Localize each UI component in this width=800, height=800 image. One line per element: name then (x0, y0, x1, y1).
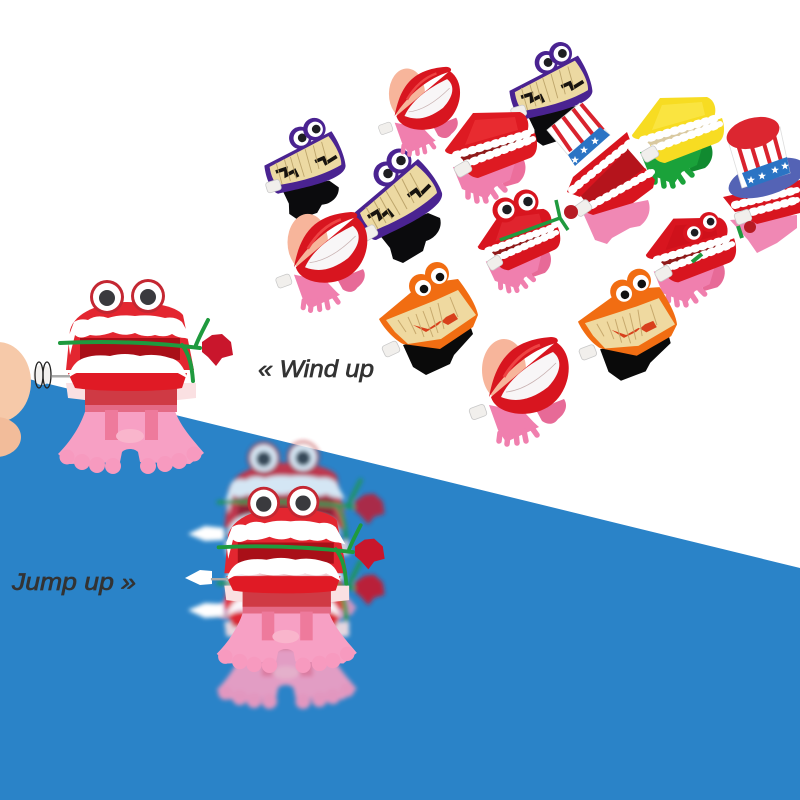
striped hat (547, 103, 610, 166)
label: jump up: Jump up » (11, 569, 136, 596)
toy: jumping teeth with motion blur (185, 441, 385, 709)
main key (185, 570, 212, 585)
toy: large rose chatter teeth (52, 279, 233, 474)
toy: top hat teeth right (723, 112, 800, 253)
toy: purple eyed teeth center (354, 148, 442, 263)
leaf and stem (692, 226, 742, 262)
open red jaws (567, 132, 655, 215)
toy: red lips left (275, 212, 367, 310)
toy: top hat teeth center (547, 103, 655, 244)
toy: small rose teeth center (476, 190, 578, 292)
toy: red flat-top teeth (445, 112, 537, 201)
toy: yellow flat-top teeth (632, 97, 724, 186)
foot (730, 215, 797, 253)
toy: orange teeth left (379, 262, 478, 375)
top hat (723, 112, 800, 207)
toy: red lips bottom (468, 337, 569, 444)
toy: purple eyed teeth top left (254, 109, 355, 227)
hand holding toy (0, 342, 31, 457)
upper jaw (723, 180, 800, 212)
winding key with rotation arrows (33, 362, 51, 388)
foot (583, 200, 650, 244)
blue background panel (0, 372, 800, 800)
toy: red lips top (378, 67, 460, 155)
main toy (211, 486, 385, 673)
toy: orange teeth right (574, 265, 681, 384)
rose and stem (500, 200, 578, 240)
toy: purple eyed teeth top (499, 33, 602, 154)
rose (744, 221, 756, 233)
lower jaw (737, 195, 800, 224)
ghost keys (188, 526, 224, 618)
motion ghost lower (211, 522, 385, 709)
label: wind up: « Wind up (258, 356, 374, 383)
motion ghost upper (211, 441, 385, 628)
toy: small rose teeth right (646, 212, 756, 305)
